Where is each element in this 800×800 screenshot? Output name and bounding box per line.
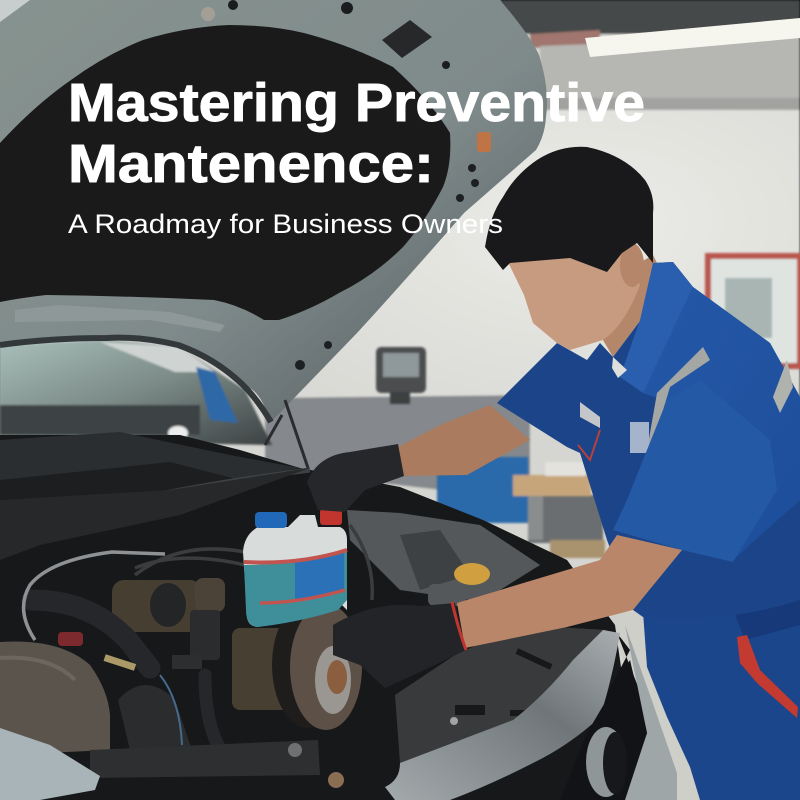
brake cylinder	[232, 628, 292, 710]
hair	[485, 147, 653, 272]
white tee	[612, 357, 627, 378]
red ring cap	[58, 632, 83, 646]
title	[68, 73, 645, 194]
near forearm	[457, 535, 682, 648]
hood latch	[382, 20, 432, 58]
cowl panels	[0, 432, 300, 520]
far glove	[307, 444, 404, 512]
red cap	[320, 509, 342, 525]
top left bright corner	[0, 0, 30, 22]
orange sticker	[477, 132, 491, 152]
hood bolt	[201, 7, 215, 21]
reservoir	[428, 584, 466, 606]
title: Mastering Preventive	[68, 73, 645, 133]
right bumper	[623, 625, 677, 800]
hood underside insulation	[0, 25, 450, 320]
grey engine cover	[347, 510, 540, 600]
subtitle: A Roadmay for Business Owners	[68, 209, 503, 239]
blue cap	[255, 512, 287, 528]
intake parts	[195, 578, 225, 612]
front grey cover	[0, 728, 100, 800]
grille again	[575, 660, 647, 800]
throttle body	[112, 580, 202, 632]
floor beside car	[610, 612, 700, 800]
bumper band	[385, 630, 620, 800]
waist elastic	[735, 597, 800, 640]
pants	[643, 590, 800, 800]
air filter housing	[0, 641, 110, 755]
hood support rods	[265, 400, 308, 468]
lower bracket	[90, 740, 320, 778]
glove red cuff	[452, 602, 466, 650]
brake disc	[272, 602, 362, 730]
collar	[620, 262, 693, 393]
near glove	[333, 603, 466, 688]
neck	[603, 255, 667, 357]
reflective stripes	[647, 347, 710, 450]
badge	[586, 727, 626, 797]
ear	[620, 243, 644, 287]
face	[508, 243, 640, 350]
shirt torso	[497, 262, 800, 619]
chest logo	[630, 422, 649, 453]
oil filler cap	[454, 563, 490, 585]
near sleeve	[613, 380, 777, 562]
far arm skin	[398, 405, 530, 476]
name tag	[580, 402, 600, 428]
front plastic cover	[395, 625, 607, 763]
car front bumper and grille	[385, 625, 677, 800]
pants red stripe	[737, 635, 798, 718]
opening arch shadow	[0, 338, 271, 422]
coolant jug	[243, 509, 347, 627]
ceiling light	[585, 18, 800, 57]
shoulder and back	[643, 287, 800, 560]
hoses	[32, 600, 218, 745]
hood lip highlight	[15, 305, 225, 332]
wall monitor	[376, 347, 426, 404]
grille	[560, 633, 655, 800]
red framed window	[708, 256, 800, 366]
mechanic	[307, 147, 800, 800]
windshield	[0, 340, 272, 445]
pocket red trim	[578, 430, 600, 460]
lower intake	[118, 685, 192, 750]
blue storage bin and workbench	[437, 457, 605, 558]
title: Mantenence:	[68, 134, 434, 194]
open car hood	[0, 0, 547, 422]
brass fitting	[104, 654, 136, 671]
engine bay	[0, 432, 640, 800]
hood side holes	[295, 164, 479, 370]
